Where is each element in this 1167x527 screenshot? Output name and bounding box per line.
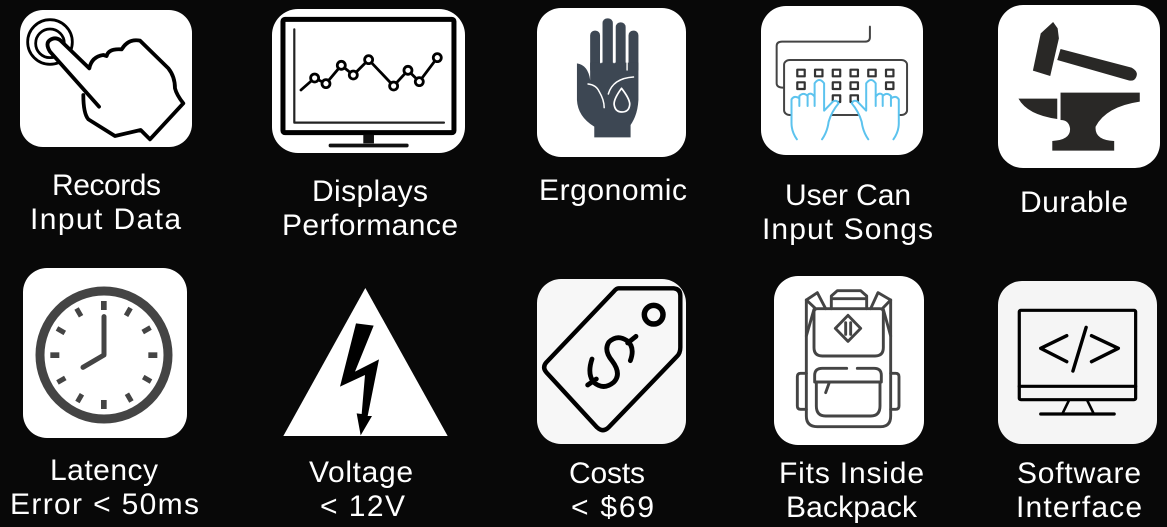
item: durable — [998, 5, 1160, 219]
item: software interface — [998, 281, 1157, 524]
item: latency error — [10, 268, 199, 521]
label: software interface: Interface — [1016, 491, 1142, 524]
label: voltage — [309, 456, 413, 523]
label: records input data: Input Data — [30, 203, 181, 236]
icon: clock — [40, 291, 168, 419]
item: displays performance — [272, 9, 465, 242]
icon: backpack — [797, 291, 899, 427]
label: durable: Durable — [1020, 186, 1128, 219]
label: voltage: Voltage — [309, 456, 413, 489]
label: records input data: Records — [52, 169, 161, 202]
icon: monitor with line chart — [283, 19, 454, 147]
icon: high voltage triangle — [283, 288, 448, 436]
panel: hand background — [537, 8, 686, 157]
label: fits inside backpack: Backpack — [786, 491, 918, 524]
label: displays performance: Performance — [282, 209, 458, 242]
icon: code monitor — [1019, 310, 1136, 414]
label: software interface — [1016, 457, 1142, 524]
panel: price tag background — [537, 279, 686, 444]
label: latency error: Error < 50ms — [10, 488, 199, 521]
label: costs: < $69 — [571, 491, 654, 524]
icon: price tag — [544, 288, 680, 430]
item: records input data — [20, 10, 192, 236]
panel: anvil background — [998, 5, 1160, 168]
label: latency error: Latency — [50, 454, 158, 487]
panel: code monitor background — [998, 281, 1157, 444]
label: displays performance — [282, 175, 458, 242]
label: displays performance: Displays — [312, 175, 428, 208]
panel: monitor background — [272, 9, 465, 153]
label: ergonomic: Ergonomic — [539, 174, 687, 207]
icon: keyboard with hands — [777, 27, 907, 139]
item: ergonomic — [537, 8, 687, 207]
label: voltage: < 12V — [320, 490, 405, 523]
panel: backpack background — [774, 276, 924, 445]
item: costs — [537, 279, 686, 524]
label: user can input songs: Input Songs — [762, 213, 933, 246]
label: software interface: Software — [1017, 457, 1141, 490]
label: costs — [569, 457, 654, 524]
panel: touch background — [20, 10, 192, 147]
item: fits inside backpack — [774, 276, 924, 524]
panel: clock background — [23, 268, 187, 438]
label: costs: Costs — [569, 457, 645, 490]
icon: hand with drop — [577, 18, 638, 137]
label: fits inside backpack: Fits Inside — [779, 457, 924, 490]
icon: hand tapping — [28, 20, 183, 139]
label: fits inside backpack — [779, 457, 924, 524]
icon: hammer and anvil — [1018, 22, 1140, 151]
item: user can input songs — [761, 6, 933, 246]
label: latency error — [10, 454, 199, 521]
panel: keyboard background — [761, 6, 923, 155]
label: user can input songs: User Can — [785, 179, 911, 212]
item: voltage — [283, 288, 448, 523]
label: records input data — [30, 169, 181, 236]
label: user can input songs — [762, 179, 933, 246]
